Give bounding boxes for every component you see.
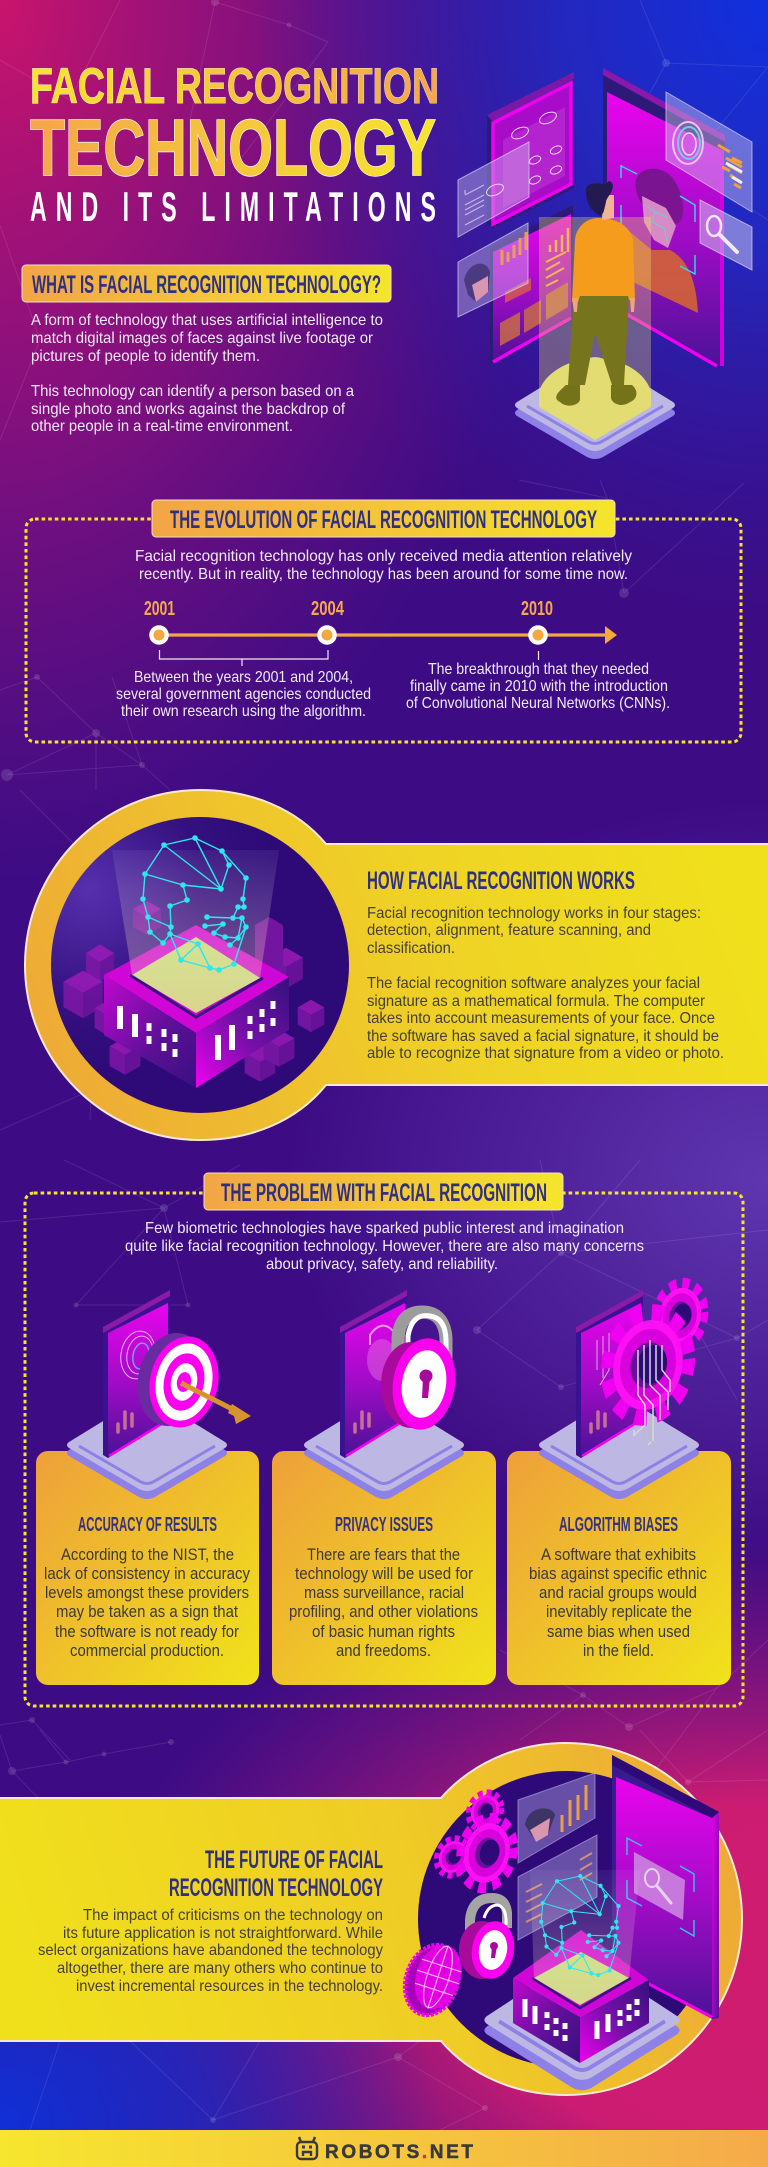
footer (0, 2130, 768, 2167)
body text: the software has saved a facial signature, it should be (367, 1028, 719, 1045)
card: accuracy of results (36, 1290, 259, 1685)
dashed frame (26, 519, 741, 742)
heading pill: THE PROBLEM WITH FACIAL RECOGNITION (221, 1179, 547, 1207)
person (556, 181, 636, 406)
big panel (612, 1755, 719, 2019)
timeline note right (406, 661, 670, 712)
icon: robot logo (297, 2137, 317, 2159)
face mesh (140, 835, 249, 973)
card text (529, 1545, 707, 1660)
card text (44, 1545, 250, 1660)
box body (104, 925, 289, 1088)
body text: altogether, there are many others who continue to (57, 1960, 383, 1977)
heading (169, 1846, 383, 1902)
timeline note right: The breakthrough that they needed (428, 661, 649, 678)
card text: commercial production. (70, 1641, 224, 1660)
intro text: recently. But in reality, the technology has been around for some time now. (139, 566, 628, 583)
body text: detection, alignment, feature scanning, and (367, 922, 651, 939)
box body (513, 1930, 649, 2063)
glass panels (458, 92, 752, 317)
timeline markers (149, 625, 548, 645)
platform (515, 357, 675, 459)
arrow head (605, 626, 617, 644)
definition text (31, 312, 383, 435)
heading pill: WHAT IS FACIAL RECOGNITION TECHNOLOGY? (32, 271, 381, 299)
title line 1: FACIAL RECOGNITION (30, 58, 439, 114)
body text: select organizations have abandoned the technology (38, 1942, 383, 1959)
gears (436, 1790, 514, 1893)
year labels: 2010 (521, 598, 553, 620)
body text (38, 1907, 383, 1995)
body text (367, 905, 724, 1062)
section: what is facial recognition technology (22, 265, 391, 435)
padlock (459, 1898, 519, 1982)
body text: able to recognize that signature from a video or photo. (367, 1045, 724, 1062)
body text: The facial recognition software analyzes your facial (367, 975, 700, 992)
bracket 2001–2004 (160, 650, 538, 666)
card text: bias against specific ethnic (529, 1564, 707, 1583)
scan beam (530, 1870, 640, 2005)
body text: Facial recognition technology works in four stages: (367, 905, 701, 922)
heading: RECOGNITION TECHNOLOGY (169, 1874, 383, 1902)
scan beam (112, 850, 279, 1013)
logo wordmark: ROBOTS.NET (325, 2142, 473, 2163)
yellow band and circle (25, 790, 768, 1140)
floating cubes (63, 901, 324, 1082)
body text: invest incremental resources in the technology. (76, 1978, 383, 1995)
timeline note left (116, 669, 371, 720)
intro text: Few biometric technologies have sparked public interest and imagination (145, 1220, 624, 1237)
beam pool on platform (539, 358, 651, 440)
definition text: match digital images of faces against live footage or (31, 330, 374, 347)
year labels (144, 598, 553, 620)
year labels: 2001 (144, 598, 175, 620)
dark circle (418, 1771, 714, 2067)
light beam (539, 217, 651, 392)
illustration: face scan cube (51, 817, 349, 1113)
card text: levels amongst these providers (45, 1583, 249, 1602)
face mesh (539, 1874, 621, 1977)
definition text: This technology can identify a person based on a (31, 383, 354, 400)
timeline note right: finally came in 2010 with the introduction (410, 678, 668, 695)
card text: in the field. (583, 1641, 654, 1660)
globe (396, 1938, 469, 2022)
illustration: person viewing face-recognition screens (458, 68, 752, 459)
glass screens (518, 1773, 597, 1940)
intro text: about privacy, safety, and reliability. (266, 1256, 498, 1273)
card text: profiling, and other violations (289, 1602, 478, 1621)
heading pill (204, 1173, 563, 1210)
right main panel (603, 68, 725, 367)
card text: lack of consistency in accuracy (44, 1564, 250, 1583)
body text: its future application is not straightforward. While (63, 1925, 383, 1942)
left upper panel (487, 72, 574, 228)
dark circle (51, 817, 349, 1113)
dashed frame (25, 1193, 743, 1706)
card heading: ACCURACY OF RESULTS (78, 1514, 217, 1536)
card: algorithm biases (507, 1279, 731, 1685)
intro text: quite like facial recognition technology. However, there are also many concerns (125, 1238, 644, 1255)
card text: technology will be used for (295, 1564, 473, 1583)
intro text: Facial recognition technology has only received media attention relatively (135, 548, 632, 565)
card text: mass surveillance, racial (304, 1583, 464, 1602)
title line 3: AND ITS LIMITATIONS (30, 184, 436, 231)
icon: gears and circuits on screen (539, 1279, 705, 1499)
heading pill (152, 500, 615, 537)
timeline note left: Between the years 2001 and 2004, (134, 669, 353, 686)
title (30, 58, 439, 231)
timeline arrow (159, 633, 606, 637)
body text: classification. (367, 940, 455, 957)
intro text (135, 548, 632, 583)
card: privacy issues (272, 1290, 496, 1685)
section: the problem with facial recognition (25, 1173, 743, 1706)
platform (484, 1958, 680, 2090)
body text: takes into account measurements of your face. Once (367, 1010, 715, 1027)
definition text: A form of technology that uses artificial intelligence to (31, 312, 383, 329)
timeline note left: their own research using the algorithm. (121, 703, 366, 720)
section: how facial recognition works (25, 790, 768, 1140)
card text: same bias when used (547, 1622, 690, 1641)
card text: and freedoms. (336, 1641, 431, 1660)
card text: According to the NIST, the (61, 1545, 234, 1564)
body text: signature as a mathematical formula. The computer (367, 993, 706, 1010)
yellow band and circle (0, 1743, 742, 2095)
card heading: PRIVACY ISSUES (335, 1514, 433, 1536)
card text: may be taken as a sign that (56, 1602, 238, 1621)
portrait on screen (621, 165, 698, 313)
timeline note right: of Convolutional Neural Networks (CNNs). (406, 695, 670, 712)
section: the future of facial recognition technology (0, 1743, 742, 2095)
card text: inevitably replicate the (546, 1602, 692, 1621)
icon: target on screen (67, 1290, 251, 1499)
body text: The impact of criticisms on the technology on (83, 1907, 383, 1924)
definition text: pictures of people to identify them. (31, 348, 260, 365)
heading pill (22, 265, 391, 302)
card text: the software is not ready for (55, 1622, 239, 1641)
timeline (144, 598, 617, 666)
card text: of basic human rights (312, 1622, 455, 1641)
intro text (125, 1220, 644, 1273)
left lower panel (490, 205, 573, 365)
timeline note left: several government agencies conducted (116, 686, 371, 703)
definition text: single photo and works against the backdrop of (31, 401, 346, 418)
section: the evolution of facial recognition technology (26, 500, 741, 742)
definition text: other people in a real-time environment. (31, 418, 293, 435)
year labels: 2004 (311, 598, 345, 620)
card text (289, 1545, 478, 1660)
icon: padlock on screen (304, 1290, 464, 1499)
title line 2: TECHNOLOGY (30, 103, 436, 192)
illustration: security and face scan (396, 1755, 719, 2090)
card text: A software that exhibits (541, 1545, 696, 1564)
card text: and racial groups would (539, 1583, 697, 1602)
card text: There are fears that the (307, 1545, 460, 1564)
card heading: ALGORITHM BIASES (559, 1514, 678, 1536)
heading: THE FUTURE OF FACIAL (205, 1846, 383, 1874)
